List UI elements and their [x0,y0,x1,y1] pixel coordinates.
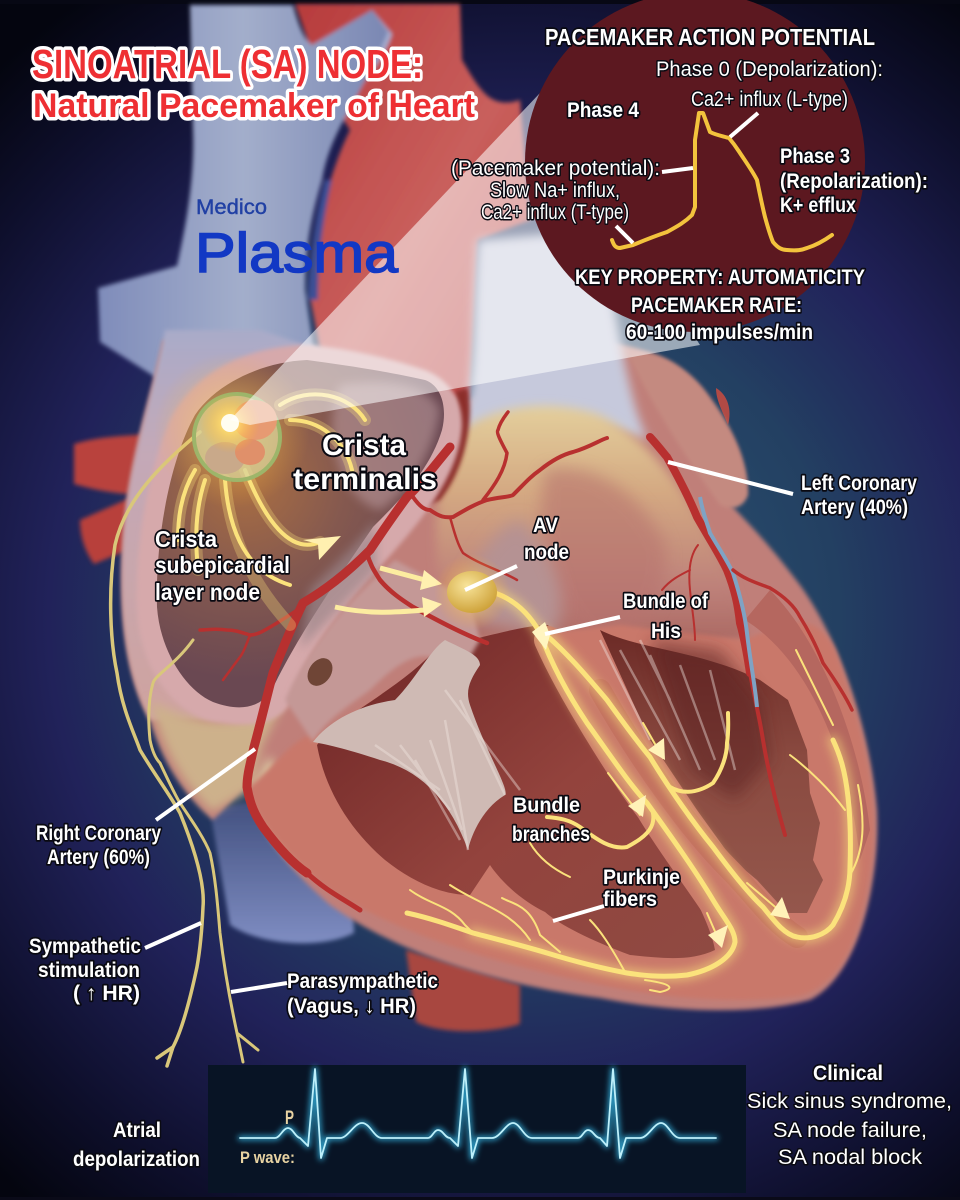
key property [575,266,865,344]
SA node [194,393,280,480]
nerves [111,432,258,1066]
label: Sympathetic stimulation: ( ↑ HR) [73,982,140,1005]
His junction [532,622,550,650]
label: Bundle of His: Bundle of [623,590,709,613]
great vessels [98,4,530,400]
phase 3 label: Phase 3 [780,145,850,168]
phase 4 label: Phase 4 [567,99,639,122]
ventricular wall [247,622,874,1000]
arrow: internodal upper [380,568,442,590]
clinical text [747,1062,952,1169]
red stub vessels left [74,434,150,564]
arrow: internodal lower [335,597,442,617]
label: Left Coronary Artery: Artery (40%) [801,496,908,519]
phase 4 label: Ca2+ influx (T-type) [481,201,629,224]
phase 4 label: Slow Na+ influx, [490,179,620,202]
action potential curve [612,113,832,250]
label: Purkinje fibers: Purkinje [603,866,680,889]
auricle crease [628,353,747,508]
key property: KEY PROPERTY: AUTOMATICITY [575,266,865,289]
label: Bundle of His [623,590,709,643]
leader: pacemaker potential [662,168,693,172]
membrane [285,560,480,742]
right atrium shoulder [122,330,320,720]
leader: L-type influx [730,113,758,137]
right atrium interior [157,360,444,707]
ECG panel [208,1065,746,1193]
label: Crista subepicardial layer node [155,526,290,605]
label: Crista terminalis [293,429,437,496]
logo: Medico Plasma [195,196,399,284]
phase 0 label [656,58,883,111]
left ventricle cavity [600,630,823,913]
title: Natural Pacemaker of Heart [33,87,475,125]
logo: Medico Plasma: Medico [196,196,267,219]
leader: Sympathetic [145,923,201,948]
heart body [122,340,877,1010]
label: Bundle branches: Bundle [513,794,580,817]
label: Crista terminalis: terminalis [293,463,437,496]
clinical text: SA node failure, [773,1119,927,1142]
valve and chordae [313,640,735,850]
P wave label: P wave: [240,1148,295,1167]
label: Parasympathetic [287,970,438,1018]
panel circle [525,0,865,332]
label: Left Coronary Artery [801,472,917,519]
label: AV node: node [524,541,569,564]
label: Right Coronary Artery: Right Coronary [36,822,161,845]
leader: Right Coronary [156,749,255,820]
label: Crista subepicardial layer node: Crista [155,526,217,552]
label: Right Coronary Artery [36,822,161,869]
label: Purkinje fibers [603,866,680,911]
label: Parasympathetic: (Vagus, ↓ HR) [287,995,416,1018]
phase 3 label: (Repolarization): [780,170,928,193]
anterior surface [436,406,745,650]
label: Left Coronary Artery: Left Coronary [801,472,917,495]
label: Bundle of His: His [651,620,681,643]
AV node [434,554,510,630]
septal wall bands [548,640,797,940]
label: Atrial depolarization: depolarization [73,1148,200,1171]
panel heading: PACEMAKER ACTION POTENTIAL [545,24,875,50]
phase 4 label [451,99,660,224]
label: Parasympathetic: Parasympathetic [287,970,438,993]
key property: 60-100 impulses/min [626,321,813,344]
logo: Medico Plasma: Plasma [195,221,399,284]
label: Crista subepicardial layer node: layer node [155,579,260,605]
phase 3 label [780,145,928,217]
descending aorta [406,950,520,1031]
left auricle [600,342,747,506]
P marker: P [285,1108,294,1129]
phase 0 label: Phase 0 (Depolarization): [656,58,883,81]
leader: Bundle of His [545,617,620,634]
parasympathetic nerve [149,640,258,1062]
title: SINOATRIAL (SA) NODE: [32,41,423,87]
label: Bundle branches [512,794,590,846]
leader: Purkinje [553,906,604,921]
label: Atrial depolarization [73,1119,200,1171]
leader: T-type influx [616,226,633,243]
arrowheads [628,738,790,948]
title [32,41,475,125]
pale pulmonary trunk [455,230,648,440]
clinical text: Sick sinus syndrome, [747,1090,952,1113]
inferior vena cava [210,800,354,943]
label: Crista terminalis: Crista [322,429,406,462]
ECG background [208,1065,746,1193]
leader: Left Coronary [668,462,793,494]
leader: AV node [465,566,517,590]
label: Crista subepicardial layer node: subepicardial [155,552,290,578]
label: Sympathetic stimulation: stimulation [38,959,140,982]
sympathetic nerve [111,432,203,1066]
label: Sympathetic stimulation [29,935,141,1005]
phase 0 label: Ca2+ influx (L-type) [691,88,848,111]
label: Bundle branches: branches [512,823,590,846]
lower-left tan wall [150,700,345,872]
label: Right Coronary Artery: Artery (60%) [47,846,150,869]
conduction system [407,593,863,992]
label: Sympathetic stimulation: Sympathetic [29,935,141,958]
phase 4 label: (Pacemaker potential): [451,157,660,180]
label: Purkinje fibers: fibers [603,888,657,911]
clinical text: SA nodal block [778,1146,923,1169]
label: Atrial depolarization: Atrial [113,1119,161,1142]
right ventricle cavity [317,625,715,958]
clinical text: Clinical [813,1062,883,1085]
label: AV node [524,514,569,564]
magnifier beam [230,93,700,425]
phase 3 label: K+ efflux [780,194,856,217]
ECG trace [240,1069,716,1158]
right atrium wall [137,345,462,725]
leader: Parasympathetic [231,983,287,992]
arrow: to atrium [303,536,341,560]
panel: pacemaker action potential [451,0,928,344]
label: AV node: AV [533,514,558,537]
coronary arteries [200,412,852,910]
key property: PACEMAKER RATE: [631,294,802,317]
SA node conduction [154,352,442,625]
dark red gap beside atrium [415,388,470,510]
heart illustration [74,4,877,1066]
